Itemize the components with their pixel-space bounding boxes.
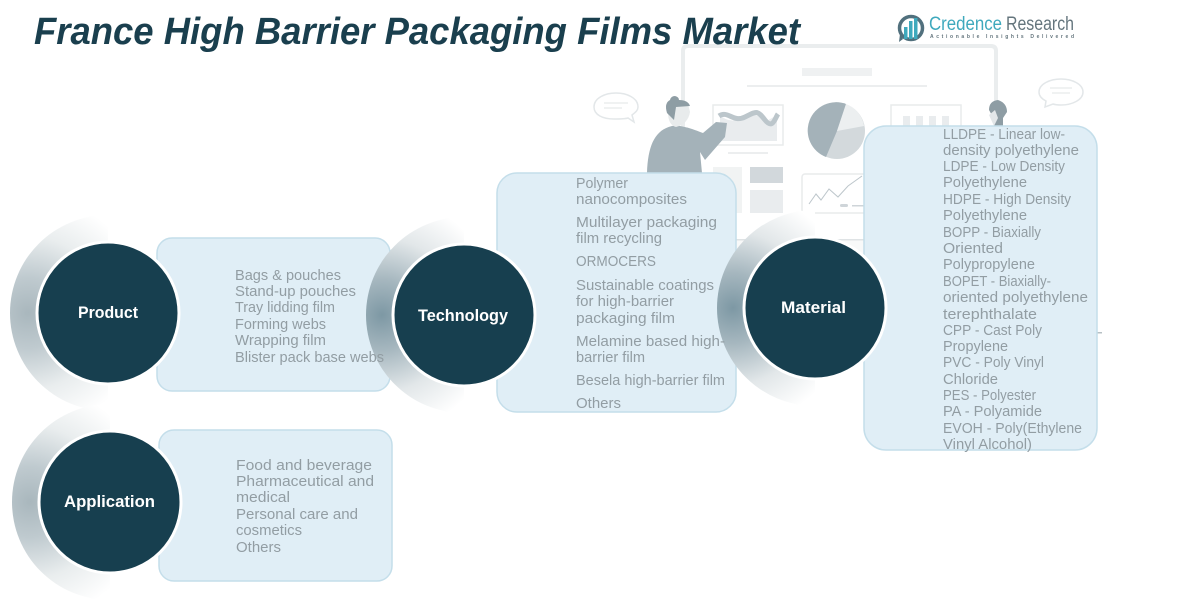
background illustration: presentation [594, 46, 1102, 340]
technology list text: nanocomposites [576, 191, 687, 208]
product list text: Forming webs [235, 316, 326, 333]
block tiles [713, 167, 783, 213]
product list text [235, 267, 384, 366]
badge: Application: Application [64, 492, 155, 511]
panel: material list [864, 126, 1097, 453]
badge: Material: Material [781, 298, 846, 317]
panel: product [157, 238, 390, 391]
technology list text: for high-barrier [576, 293, 674, 310]
panel: material list: terephthalate [943, 306, 1037, 323]
panel: material list: Vinyl Alcohol) [943, 436, 1032, 453]
panel: material list: HDPE - High Density [943, 191, 1071, 208]
panel: material list: PES - Polyester [943, 387, 1036, 404]
panel: application list: cosmetics [236, 522, 302, 539]
badge: Product [10, 215, 179, 411]
area chart card [713, 105, 783, 154]
title: France High Barrier Packaging Films Market [34, 11, 801, 53]
panel: application list [159, 430, 392, 581]
badge: Material [717, 210, 886, 406]
panel: material list: Polypropylene [943, 256, 1035, 273]
panel: material list: LLDPE - Linear low- [943, 126, 1065, 143]
product list text: Wrapping film [235, 332, 326, 349]
panel: material list: density polyethylene [943, 142, 1079, 159]
panel: material list: PVC - Poly Vinyl [943, 354, 1044, 371]
technology list text: ORMOCERS [576, 253, 656, 270]
product list text: Blister pack base webs [235, 349, 384, 366]
speech bubble right [1039, 79, 1083, 107]
technology list text: film recycling [576, 230, 662, 247]
panel: material list: Propylene [943, 338, 1008, 355]
pie chart [808, 102, 865, 159]
panel: application list: Personal care and [236, 506, 358, 523]
product list text: Tray lidding film [235, 299, 335, 316]
panel: material list: BOPET - Biaxially- [943, 273, 1051, 290]
badge: Technology: Technology [418, 306, 509, 325]
presenter woman [647, 96, 727, 173]
desk lines [736, 239, 1102, 334]
logo tagline: Actionable Insights Delivered [930, 34, 1074, 40]
panel: material list: CPP - Cast Poly [943, 322, 1042, 339]
technology list text: Others [576, 395, 621, 412]
technology list text: Besela high-barrier film [576, 372, 725, 389]
product list text: Stand-up pouches [235, 283, 356, 300]
bar card [891, 105, 961, 145]
monitor frame [683, 46, 996, 340]
technology list text: Polymer [576, 175, 628, 192]
technology list text: packaging film [576, 310, 675, 327]
technology list text: Multilayer packaging [576, 214, 717, 231]
panel: material list: BOPP - Biaxially [943, 224, 1041, 241]
technology list text: barrier film [576, 349, 645, 366]
presenter man [989, 100, 1007, 126]
panel: material list: Polyethylene [943, 174, 1027, 191]
panel: material list: Polyethylene [943, 207, 1027, 224]
logo: Credence Research: Research [1006, 14, 1074, 35]
logo: Credence Research [899, 14, 1074, 42]
line chart card [802, 174, 877, 213]
speech bubble left [594, 93, 638, 122]
panel: application list: medical [236, 489, 290, 506]
panel: material list: oriented polyethylene [943, 289, 1088, 306]
technology list text [576, 175, 725, 412]
panel: material list: Chloride [943, 371, 998, 388]
product list text: Bags & pouches [235, 267, 341, 284]
panel: application list: Others [236, 539, 281, 556]
badge: Application [12, 404, 181, 600]
badge: Product: Product [78, 303, 138, 322]
technology list text: Melamine based high- [576, 333, 725, 350]
panel: technology [497, 173, 736, 412]
panel: material list: PA - Polyamide [943, 403, 1042, 420]
panel: application list: Pharmaceutical and [236, 473, 374, 490]
logo wordmark: Credence [929, 14, 1002, 35]
panel: material list: EVOH - Poly(Ethylene [943, 420, 1082, 437]
panel: material list: LDPE - Low Density [943, 158, 1065, 175]
badge: Technology [366, 217, 535, 413]
panel: material list: Oriented [943, 240, 1003, 257]
logo icon [899, 16, 922, 42]
panel: application list: Food and beverage [236, 457, 372, 474]
technology list text: Sustainable coatings [576, 277, 714, 294]
